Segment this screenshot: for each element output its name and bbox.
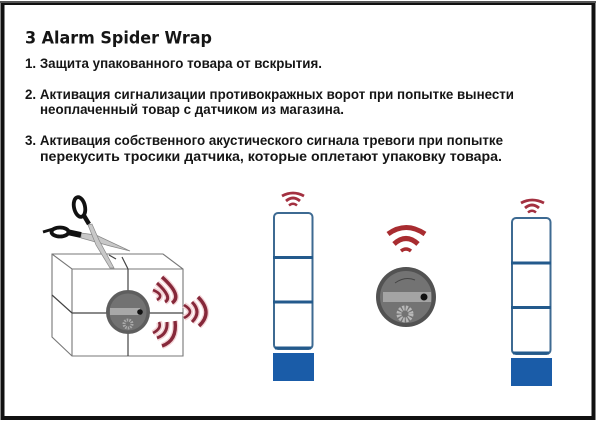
text block: item 3 [25,133,503,164]
signal waves: lower [153,321,175,346]
spider wrap cables [52,255,183,356]
illustration: right gate [511,200,552,386]
sensor [106,290,150,334]
box outline [52,254,183,356]
text block: item 2: неоплаченный товар с датчиком из магазина. [40,102,344,117]
text block: item 3: 3. Активация собственного акустического сигнала тревоги при попытке [25,133,503,148]
illustration: left gate [273,193,314,381]
gate base [511,358,552,386]
signal waves: right [184,297,206,326]
gate pillar [511,218,551,354]
illustration: central sensor [376,228,436,327]
text block: item 2 [25,87,514,117]
gate pillar [273,213,313,349]
text block: item 2: 2. Активация сигнализации противокражных ворот при попытке вынести [25,87,514,102]
sensor [376,267,436,327]
text block: item 3: перекусить тросики датчика, которые оплетают упаковку товара. [40,149,502,164]
signal icon [282,193,304,206]
illustration: wrapped box with sensor [43,196,206,356]
signal icon [388,228,425,251]
title: 3 Alarm Spider Wrap [25,28,212,48]
gate base [273,353,314,381]
signal icon [521,200,544,212]
signal waves: upper [153,277,176,303]
text block: item 1: 1. Защита упакованного товара от вскрытия. [25,56,322,71]
icon: scissors [43,196,130,268]
